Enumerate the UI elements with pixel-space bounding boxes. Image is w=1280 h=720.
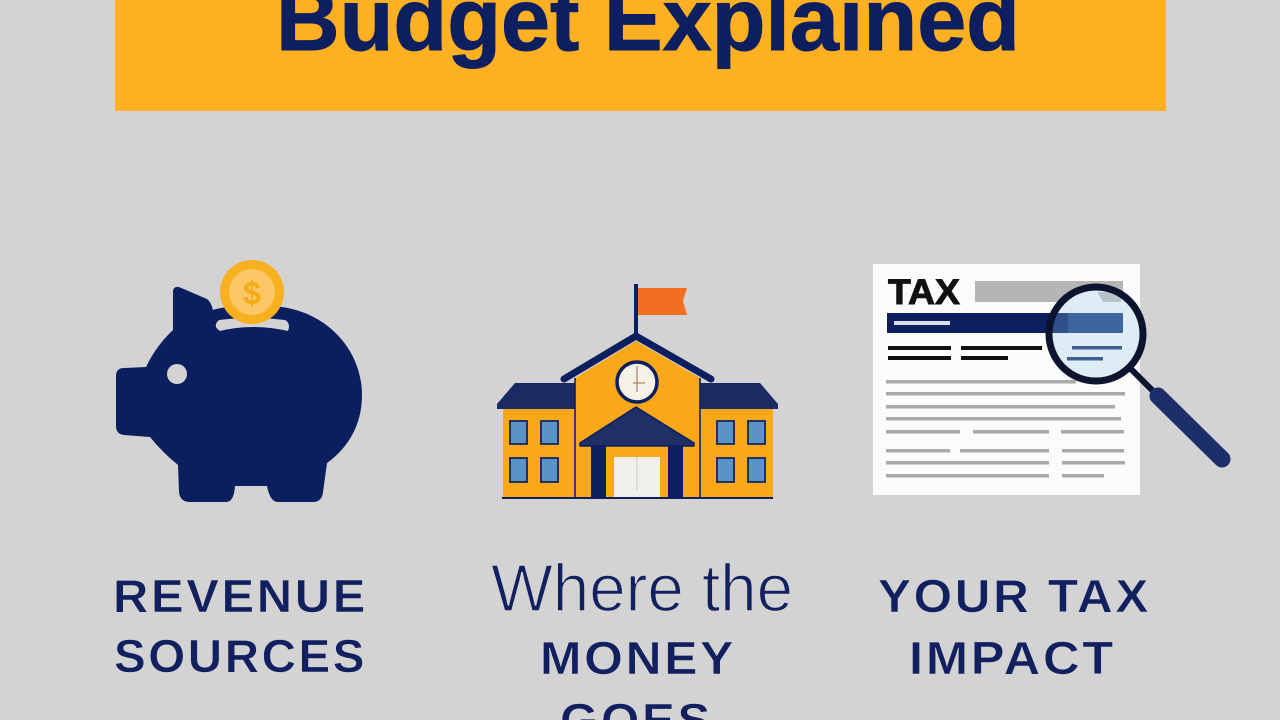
lens — [1049, 287, 1143, 381]
grey text lines — [886, 380, 1125, 478]
header bar highlight — [894, 321, 950, 325]
document heading: TAX — [888, 273, 961, 312]
title banner — [115, 0, 1166, 111]
left wing roof — [497, 383, 575, 409]
portico right column — [668, 445, 683, 497]
label: where the money goes — [491, 551, 793, 720]
label: revenue sources: SOURCES — [114, 630, 367, 682]
label: where the money goes: Where the — [491, 551, 793, 626]
windows — [510, 421, 765, 482]
grey header box — [975, 281, 1123, 302]
right wing roof — [700, 383, 778, 409]
flag — [638, 288, 687, 315]
black text lines — [888, 346, 1042, 360]
lens grey patch — [1097, 292, 1121, 302]
navy header bar — [887, 313, 1123, 333]
label: revenue sources — [113, 570, 368, 682]
main roof — [564, 336, 711, 379]
magnifier neck — [1130, 368, 1156, 394]
lens magnified bar — [1068, 313, 1123, 333]
icon: piggy bank with coin — [116, 260, 362, 502]
label: revenue sources: REVENUE — [113, 570, 368, 622]
building side lines — [575, 378, 700, 497]
coin: $ — [243, 275, 261, 311]
left wing — [503, 407, 574, 497]
magnifier — [1049, 287, 1222, 459]
label: your tax impact: IMPACT — [909, 632, 1116, 684]
document page — [873, 264, 1140, 495]
lens rim — [1049, 287, 1143, 381]
label: where the money goes: MONEY — [540, 632, 736, 684]
flag pole — [634, 284, 638, 336]
piggy eye — [167, 364, 187, 384]
ground line — [502, 497, 773, 499]
lens navy bar edge — [1050, 313, 1068, 333]
icon: school building — [497, 284, 778, 499]
coin — [220, 260, 284, 324]
label: your tax impact: YOUR TAX — [878, 570, 1151, 622]
portico left column — [591, 445, 606, 497]
clock — [617, 362, 657, 402]
door — [614, 457, 660, 497]
portico roof — [580, 407, 694, 446]
right wing — [701, 407, 773, 497]
label: your tax impact — [878, 570, 1151, 684]
magnifier handle — [1158, 396, 1222, 459]
lens magnified lines — [1067, 346, 1122, 360]
central building — [575, 341, 700, 497]
coin slot — [216, 318, 289, 331]
icon: tax document with magnifier — [873, 264, 1222, 495]
piggy body — [116, 287, 362, 502]
